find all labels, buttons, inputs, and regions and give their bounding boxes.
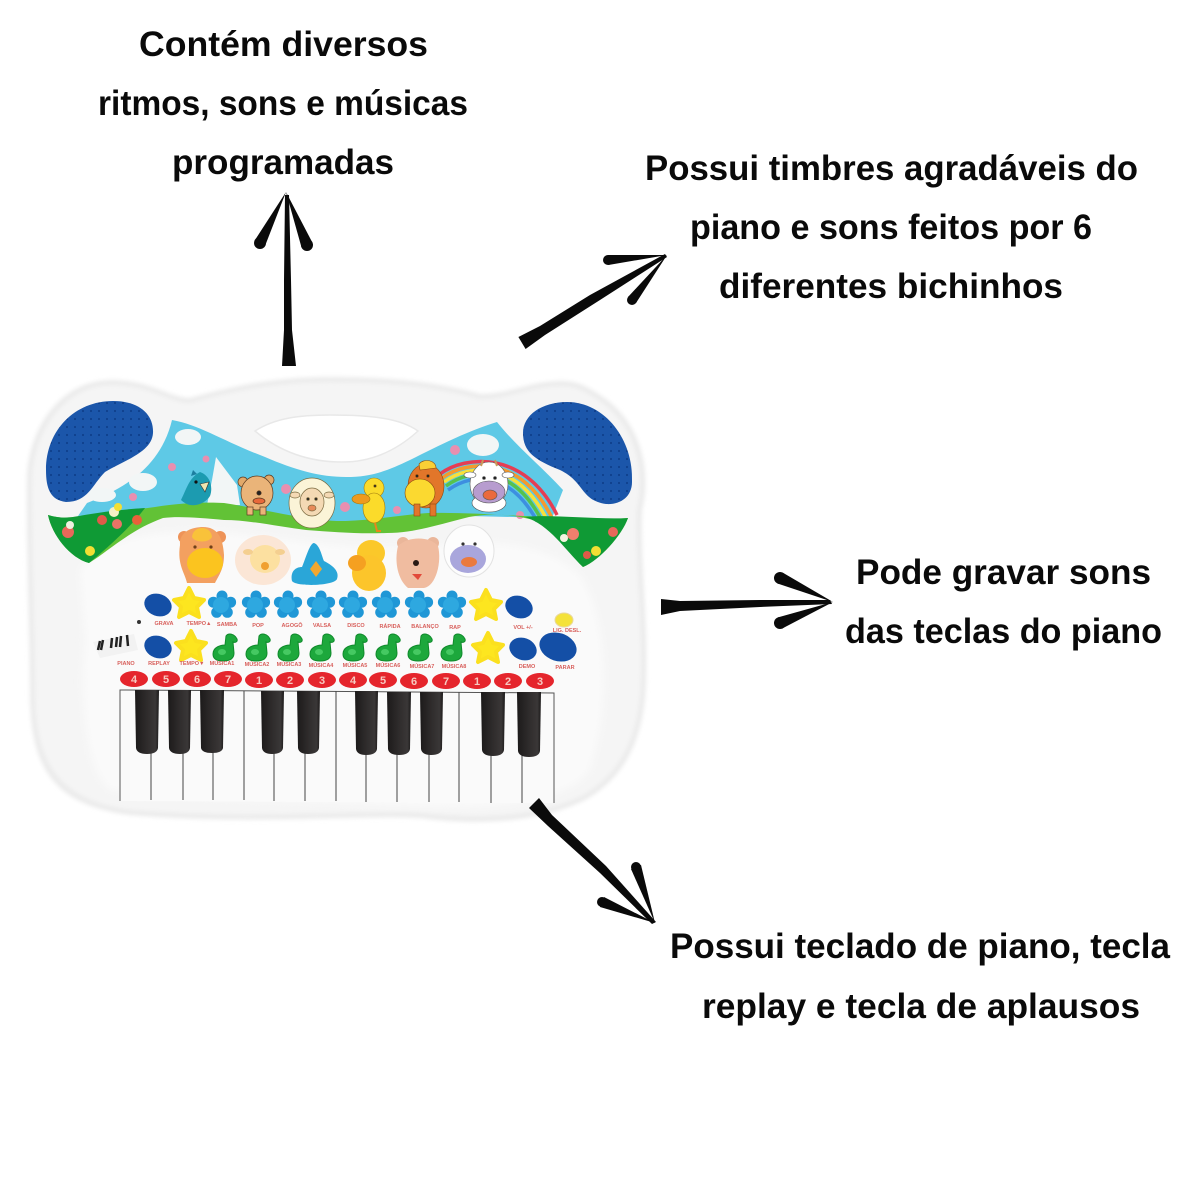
white keys — [120, 690, 554, 803]
top row labels: DISCO — [347, 623, 365, 629]
toy piano — [27, 377, 646, 822]
speaker: right — [523, 402, 632, 504]
top row labels — [154, 621, 582, 634]
speaker: left — [46, 401, 153, 502]
text: rhythms and songs: ritmos, sons e músicas — [98, 84, 468, 123]
rainbow — [440, 461, 557, 521]
text: rhythms and songs: programadas — [172, 143, 394, 182]
arrow: up to rhythms text — [254, 192, 313, 366]
text: piano timbres: piano e sons feitos por 6 — [690, 208, 1092, 247]
text: record sounds: Pode gravar sons — [856, 553, 1151, 592]
printed horse — [405, 461, 444, 516]
animal button: cow — [444, 525, 494, 577]
text: record sounds: das teclas do piano — [845, 612, 1162, 651]
top row labels: POP — [252, 623, 264, 629]
printed sheep — [289, 478, 335, 528]
number pills: 7 — [225, 674, 231, 686]
number pills: 5 — [163, 674, 169, 686]
scene: sky — [78, 420, 563, 524]
text: keyboard and replay: replay e tecla de aplausos — [702, 987, 1140, 1026]
bottom row labels: REPLAY — [148, 661, 170, 667]
text: record sounds — [845, 553, 1162, 651]
clouds — [88, 429, 499, 505]
bottom row labels: MÚSICA7 — [410, 663, 434, 670]
text: keyboard and replay — [670, 927, 1171, 1026]
bottom row labels: MÚSICA6 — [376, 662, 400, 669]
printed cow — [464, 460, 514, 512]
top row labels: VALSA — [313, 623, 331, 629]
bottom row labels: TEMPO▼ — [180, 661, 204, 667]
text: rhythms and songs: Contém diversos — [139, 25, 428, 64]
handle opening — [255, 415, 418, 462]
number pills: 6 — [194, 674, 200, 686]
animal button: bird — [292, 543, 338, 585]
text: rhythms and songs — [98, 25, 468, 182]
top row labels: TEMPO▲ — [186, 621, 212, 627]
number pills: 3 — [537, 676, 543, 688]
bottom row labels: MÚSICA5 — [343, 662, 367, 669]
black keys — [135, 690, 541, 757]
number pills: 7 — [443, 676, 449, 688]
text: keyboard and replay: Possui teclado de piano, tecla — [670, 927, 1171, 966]
bottom row labels: MÚSICA3 — [277, 661, 301, 668]
number pills: 4 — [131, 674, 138, 686]
number pills: 2 — [505, 676, 511, 688]
bottom row labels: MÚSICA2 — [245, 661, 269, 668]
top row labels: VOL +/- — [513, 625, 533, 631]
bottom row labels: DEMO — [519, 664, 536, 670]
bottom row labels: MÚSICA1 — [210, 660, 234, 667]
top row labels: GRAVA — [154, 621, 174, 627]
piano icon button — [93, 634, 138, 658]
number pills: 3 — [319, 675, 325, 687]
small printed notes — [129, 445, 524, 519]
text: piano timbres — [645, 149, 1138, 306]
number pills: 6 — [411, 676, 417, 688]
arrow: down right to keyboard text — [529, 798, 656, 924]
animal button: duck — [348, 540, 386, 591]
top row labels: LIG. DESL. — [553, 628, 582, 634]
number pills — [120, 671, 554, 689]
bottom button row — [141, 628, 580, 666]
scene: green meadow — [48, 503, 628, 567]
text: piano timbres: Possui timbres agradáveis do — [645, 149, 1138, 188]
bottom row labels: MÚSICA8 — [442, 663, 466, 670]
bottom row labels: PIANO — [117, 661, 135, 667]
printed duck — [352, 478, 385, 531]
number pills: 2 — [287, 675, 293, 687]
printed bear — [238, 475, 274, 515]
top row labels: RÁPIDA — [379, 623, 401, 630]
number pills: 1 — [256, 675, 262, 687]
number pills: 4 — [350, 675, 357, 687]
number pills: 1 — [474, 676, 480, 688]
printed bird — [181, 470, 211, 505]
bottom row labels — [117, 660, 575, 671]
arrow: right to record text — [661, 572, 833, 629]
top row labels: BALANÇO — [411, 624, 439, 630]
text: piano timbres: diferentes bichinhos — [719, 267, 1063, 306]
top row labels: SAMBA — [217, 622, 237, 628]
top button row — [137, 588, 573, 627]
top row labels: AGOGÔ — [281, 621, 303, 629]
bottom row labels: PARAR — [555, 665, 575, 671]
toy body — [27, 377, 646, 822]
animal button: bear — [396, 537, 439, 588]
arrow: up right to timbres text — [518, 254, 667, 349]
top row labels: RAP — [449, 625, 461, 631]
number pills: 5 — [380, 675, 386, 687]
meadow flowers — [62, 503, 618, 559]
piano keyboard — [120, 690, 554, 803]
bottom row labels: MÚSICA4 — [309, 662, 334, 669]
animal button: horse — [178, 527, 226, 583]
animal button: sheep — [235, 535, 291, 585]
